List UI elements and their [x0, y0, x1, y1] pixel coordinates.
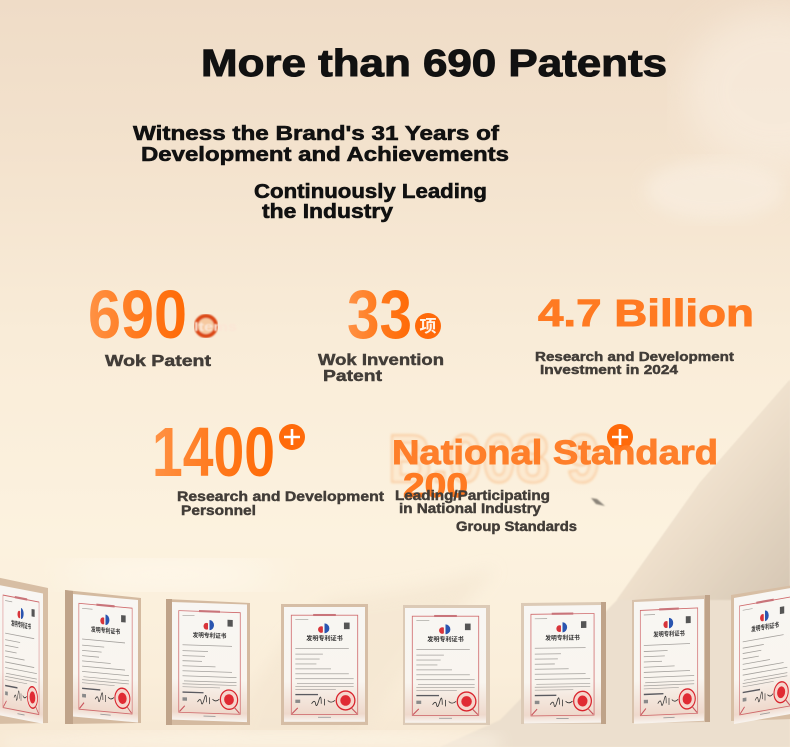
- stat: 1400 personnel: Personnel: [181, 502, 256, 518]
- subtitle: brand years: Witness the Brand's 31 Years of: [133, 122, 499, 145]
- stat: 690 wok patent: 690: [88, 276, 187, 353]
- title: More than 690 Patents: [201, 43, 667, 85]
- certificate 6: 发明专利证书: [545, 633, 580, 642]
- stat: 33 wok invention patent: Wok Invention: [318, 352, 444, 369]
- icon: plus badge: [607, 424, 633, 450]
- stat: 33 wok invention patent: 33: [347, 276, 412, 353]
- stat: 690 wok patent: [88, 276, 237, 370]
- certificate 6: [521, 602, 606, 724]
- certificate 7: 发明专利证书: [653, 629, 685, 639]
- icon: small bird: [591, 498, 605, 506]
- stat: national standard 200: National Standard: [392, 434, 718, 472]
- certificate 2: 发明专利证书: [91, 625, 120, 637]
- stat: 690 wok patent: Wok Patent: [105, 353, 211, 370]
- certificate 1: [0, 577, 48, 724]
- certificate 8: 发明专利证书: [751, 620, 779, 634]
- certificate 4: 发明专利证书: [306, 635, 343, 643]
- icon: items badge: Items: [194, 319, 237, 334]
- stat: 33 wok invention patent: Patent: [323, 368, 382, 385]
- subtitle: brand years: [133, 122, 509, 166]
- stat: 1400 personnel: [152, 413, 384, 518]
- certificate 3: [166, 599, 250, 725]
- icon: item badge: 项: [420, 317, 436, 336]
- stat: national standard 200: 200: [403, 467, 468, 505]
- certificate 5: 发明专利证书: [427, 636, 464, 644]
- stat: 1400 personnel: Research and Development: [177, 488, 384, 504]
- stat: national standard 200: Group Standards: [456, 518, 577, 534]
- blurred ghost digits: B.008 9: [388, 421, 600, 497]
- subtitle: leading the industry: Continuously Leading: [254, 180, 487, 203]
- certificate 3: 发明专利证书: [193, 631, 226, 640]
- certificate 1: 发明专利证书: [11, 618, 31, 632]
- stat: 33 wok invention patent: [318, 276, 444, 385]
- certificate 7: [632, 595, 710, 724]
- icon: items badge: [194, 316, 237, 336]
- stat: national standard 200: [388, 421, 718, 534]
- stat: 4.7 billion: Research and Development: [535, 349, 735, 364]
- subtitle: leading the industry: the Industry: [262, 200, 394, 223]
- stat: national standard 200: in National Industry: [399, 500, 541, 516]
- icon: plus badge: [279, 424, 305, 450]
- certificate 5: [403, 605, 490, 725]
- certificate wall: [0, 577, 790, 725]
- certificate 2: [65, 590, 141, 724]
- certificate 8: [731, 585, 790, 724]
- subtitle: brand years: Development and Achievements: [141, 143, 509, 166]
- stat: 4.7 billion: Investment in 2024: [540, 362, 679, 377]
- stat: national standard 200: Leading/Participating: [395, 487, 550, 503]
- stat: 4.7 billion: 4.7 Billion: [538, 293, 754, 335]
- stat: 4.7 billion: [535, 293, 754, 377]
- certificate 4: [281, 604, 368, 725]
- stat: 1400 personnel: 1400: [152, 413, 275, 491]
- subtitle: leading the industry: [254, 180, 487, 223]
